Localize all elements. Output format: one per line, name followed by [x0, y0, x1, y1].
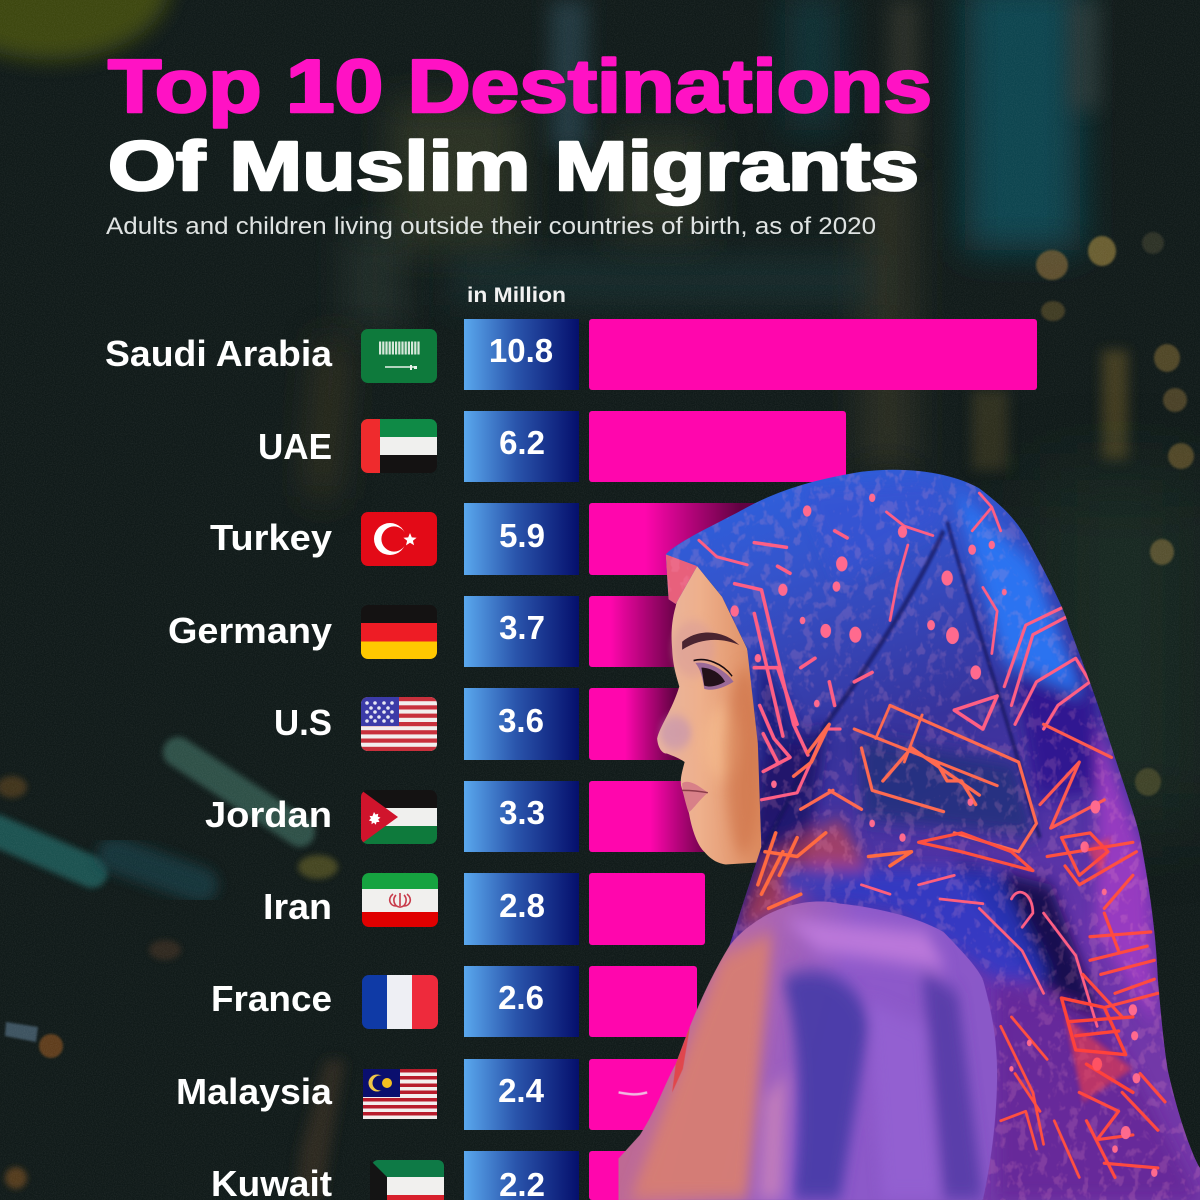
flag: United States — [361, 697, 437, 751]
subtitle: Adults and children living outside their countries of birth, as of 2020 — [106, 213, 876, 240]
value: 6.2 — [499, 424, 545, 461]
country label: Malaysia — [176, 1071, 333, 1112]
robe — [619, 894, 1011, 1200]
country label: Saudi Arabia — [105, 333, 333, 374]
sleeve highlight — [619, 1092, 647, 1094]
value box — [464, 411, 579, 482]
title — [108, 44, 932, 205]
value: 3.7 — [499, 609, 545, 646]
row: U.S — [276, 688, 682, 760]
value box — [464, 966, 579, 1037]
country label: France — [211, 978, 332, 1019]
value: 3.6 — [498, 702, 544, 739]
value: 5.9 — [499, 517, 545, 554]
bar — [589, 411, 846, 482]
row: Iran — [263, 873, 705, 945]
country label: UAE — [258, 426, 332, 467]
unit label: in Million — [467, 284, 566, 307]
flag: Malaysia — [363, 1069, 437, 1119]
flag: Kuwait — [370, 1160, 444, 1200]
row: Jordan — [205, 781, 726, 852]
value: 2.4 — [498, 1072, 545, 1109]
value box — [464, 1151, 579, 1200]
title line 1: Top 10 Destinations — [108, 44, 932, 128]
value: 10.8 — [489, 332, 553, 369]
country label: Germany — [168, 610, 332, 651]
value box — [464, 781, 579, 852]
bar — [589, 781, 726, 852]
bar — [589, 688, 738, 760]
country label: Iran — [263, 886, 332, 927]
flag: UAE — [361, 419, 437, 473]
face — [657, 566, 763, 864]
row: Saudi Arabia — [105, 319, 1037, 390]
country label: U.S — [274, 702, 332, 743]
illustration: woman in circuit-pattern hijab — [610, 460, 1200, 1200]
value box — [464, 319, 579, 390]
row: Kuwait — [211, 1151, 680, 1200]
value: 2.6 — [498, 979, 544, 1016]
hijab — [640, 460, 1200, 1200]
flag: Jordan — [361, 790, 437, 844]
value: 2.8 — [499, 887, 545, 924]
flag: Germany — [361, 605, 437, 660]
flag: Turkey — [361, 512, 437, 566]
bar — [589, 596, 742, 667]
row: Turkey — [210, 503, 755, 575]
row: Germany — [168, 596, 742, 667]
bar — [589, 1151, 680, 1200]
bar — [589, 1059, 689, 1130]
flag: Iran — [362, 873, 438, 927]
flag: France — [362, 975, 438, 1029]
row: Malaysia — [176, 1059, 689, 1130]
bar — [589, 873, 705, 945]
bar — [589, 319, 1037, 390]
bar — [589, 503, 834, 575]
shadow cast on bars — [610, 503, 834, 852]
value box — [464, 688, 579, 760]
value: 3.3 — [499, 794, 545, 831]
bar — [589, 966, 697, 1037]
country label: Turkey — [210, 517, 332, 558]
value box — [464, 503, 579, 575]
row: UAE — [258, 411, 846, 482]
title line 2: Of Muslim Migrants — [108, 127, 919, 205]
value box — [464, 596, 579, 667]
value box — [464, 1059, 579, 1130]
country label: Jordan — [205, 794, 332, 835]
value box — [464, 873, 579, 945]
flag: Saudi Arabia — [361, 329, 437, 383]
row: France — [211, 966, 697, 1037]
